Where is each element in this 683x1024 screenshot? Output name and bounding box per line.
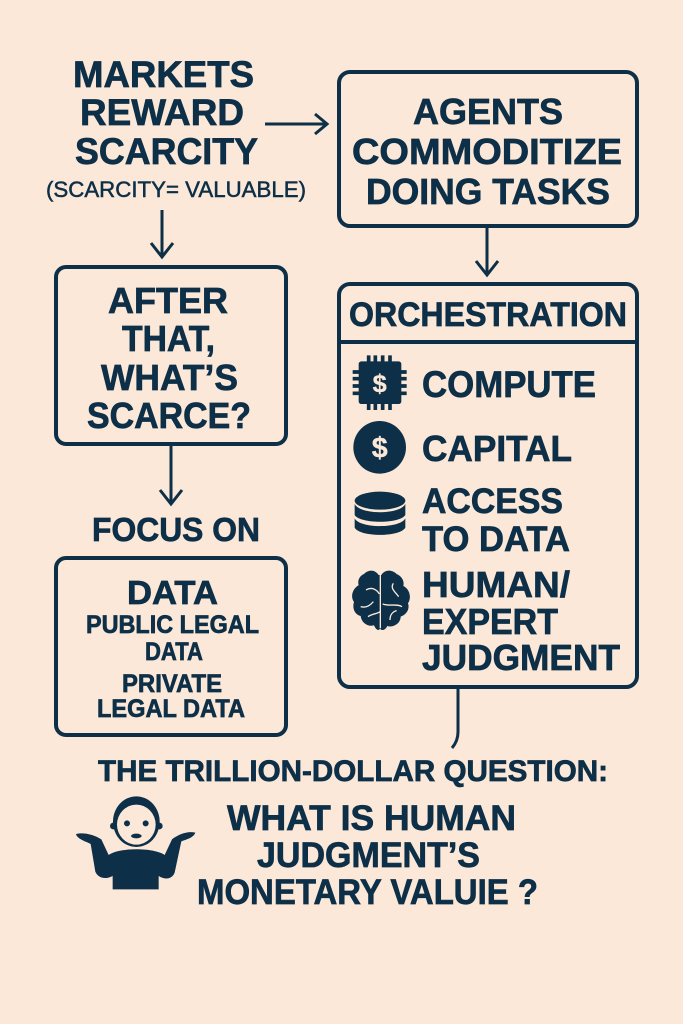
icon: capital coin: $ [372,432,388,464]
arrow: agents to orchestration [476,228,498,275]
panel: after that, what's scarce: SCARCE? [87,395,251,436]
icon: database stack [355,492,405,535]
icon: compute chip: $ [373,370,387,398]
heading: markets reward scarcity: SCARCITY [75,131,258,172]
panel: after that, what's scarce [56,267,286,444]
panel: agents commoditize doing tasks: COMMODITIZE [352,131,622,172]
panel: after that, what's scarce: THAT, [122,318,215,359]
compute label: COMPUTE [422,364,596,405]
icon: capital coin [353,421,406,474]
icon: compute chip [353,355,407,410]
icon: shrugging person [76,796,195,889]
panel: data: DATA [145,638,203,666]
question: what is human judgment's monetary value: JUDGMENT’S [257,836,480,875]
panel: agents commoditize doing tasks: AGENTS [413,91,563,132]
human expert judgment label: JUDGMENT [422,637,620,678]
heading: markets reward scarcity: (SCARCITY= VALUABLE) [46,177,306,202]
icon: brain [352,571,410,630]
panel: data [56,558,286,735]
orchestration heading: ORCHESTRATION [349,296,627,334]
panel: orchestration [339,284,637,687]
arrow: markets to agents [265,114,327,134]
question: what is human judgment's monetary value: WHAT IS HUMAN [227,799,516,838]
access to data label: TO DATA [422,520,570,559]
heading: the trillion-dollar question: THE TRILLION-DOLLAR QUESTION: [98,755,608,788]
connector: orchestration to question [452,689,458,748]
arrow: scarce to focus [160,446,182,504]
panel: data: PRIVATE [122,670,222,698]
arrow: markets to after that [151,210,173,257]
panel: data: LEGAL DATA [97,695,245,723]
panel: agents commoditize doing tasks [339,72,637,226]
heading: focus on: FOCUS ON [92,511,260,548]
question: what is human judgment's monetary value: MONETARY VALUIE ? [197,873,538,912]
panel: data: PUBLIC LEGAL [86,611,259,639]
panel: after that, what's scarce: AFTER [108,280,228,321]
heading: markets reward scarcity: MARKETS [73,54,254,95]
panel: data: DATA [127,574,218,611]
panel: after that, what's scarce: WHAT’S [101,357,238,398]
access to data label: ACCESS [422,482,563,521]
capital label: CAPITAL [422,428,572,469]
human expert judgment label [422,564,620,678]
question: what is human judgment's monetary value [197,799,538,912]
human expert judgment label: HUMAN/ [422,564,570,605]
heading: markets reward scarcity [46,54,306,202]
heading: markets reward scarcity: REWARD [80,92,244,133]
access to data label [422,482,570,559]
panel: agents commoditize doing tasks: DOING TASKS [366,171,610,212]
human expert judgment label: EXPERT [422,601,558,642]
